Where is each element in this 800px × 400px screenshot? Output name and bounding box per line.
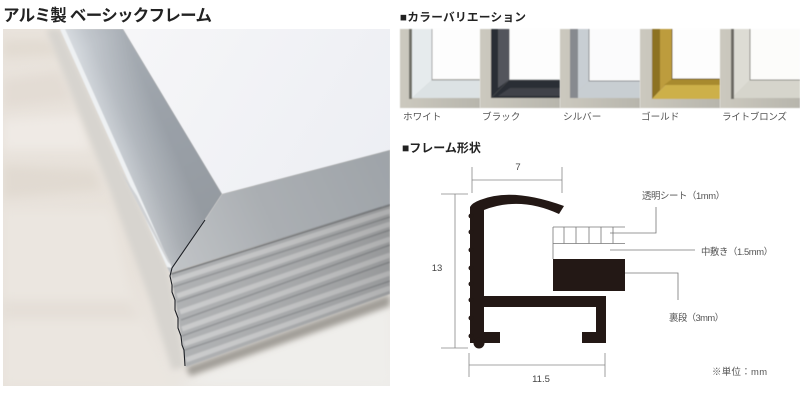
swatch labels: シルバー <box>563 112 601 123</box>
title: アルミ製 ベーシックフレーム <box>3 6 212 25</box>
backing board block <box>553 259 625 291</box>
swatch labels <box>403 111 787 123</box>
left frame face <box>60 29 222 273</box>
swatch: white frame <box>400 29 480 108</box>
swatch labels: ホワイト <box>403 112 441 123</box>
swatch: light bronze frame <box>720 29 800 108</box>
chart: frame cross-section diagram <box>432 162 773 385</box>
part labels <box>642 190 773 377</box>
part labels: 裏段（3mm） <box>669 312 724 323</box>
dimension values: 7 <box>515 162 521 173</box>
transparent sheet grid <box>553 227 625 259</box>
swatch: black frame <box>480 29 560 108</box>
part labels: ※単位：mm <box>712 366 767 377</box>
swatch labels: ブラック <box>482 111 520 123</box>
front frame ridged side <box>171 205 390 367</box>
swatch: gold frame <box>640 29 720 108</box>
heading: colour variations: ■カラーバリエーション <box>400 11 526 24</box>
part labels: 透明シート（1mm） <box>642 190 725 201</box>
swatch labels: ライトブロンズ <box>722 111 787 123</box>
swatch: silver frame <box>560 29 640 108</box>
dimension values <box>432 162 550 385</box>
white poster surface <box>123 29 390 194</box>
miter joint and ridged edge <box>170 220 205 366</box>
shadow under frame <box>186 294 390 376</box>
heading: frame profile: ■フレーム形状 <box>402 140 481 155</box>
leader lines <box>610 207 695 300</box>
part labels: 中敷き（1.5mm） <box>701 246 773 257</box>
front frame face <box>170 150 390 273</box>
dimension values: 11.5 <box>532 374 550 385</box>
frame profile shape <box>468 195 606 348</box>
dimension values: 13 <box>432 263 442 274</box>
panel: product photo of frame corner <box>3 29 390 386</box>
frame shadow on fur <box>46 29 185 370</box>
swatch labels: ゴールド <box>641 111 679 123</box>
dimension lines <box>441 167 605 377</box>
